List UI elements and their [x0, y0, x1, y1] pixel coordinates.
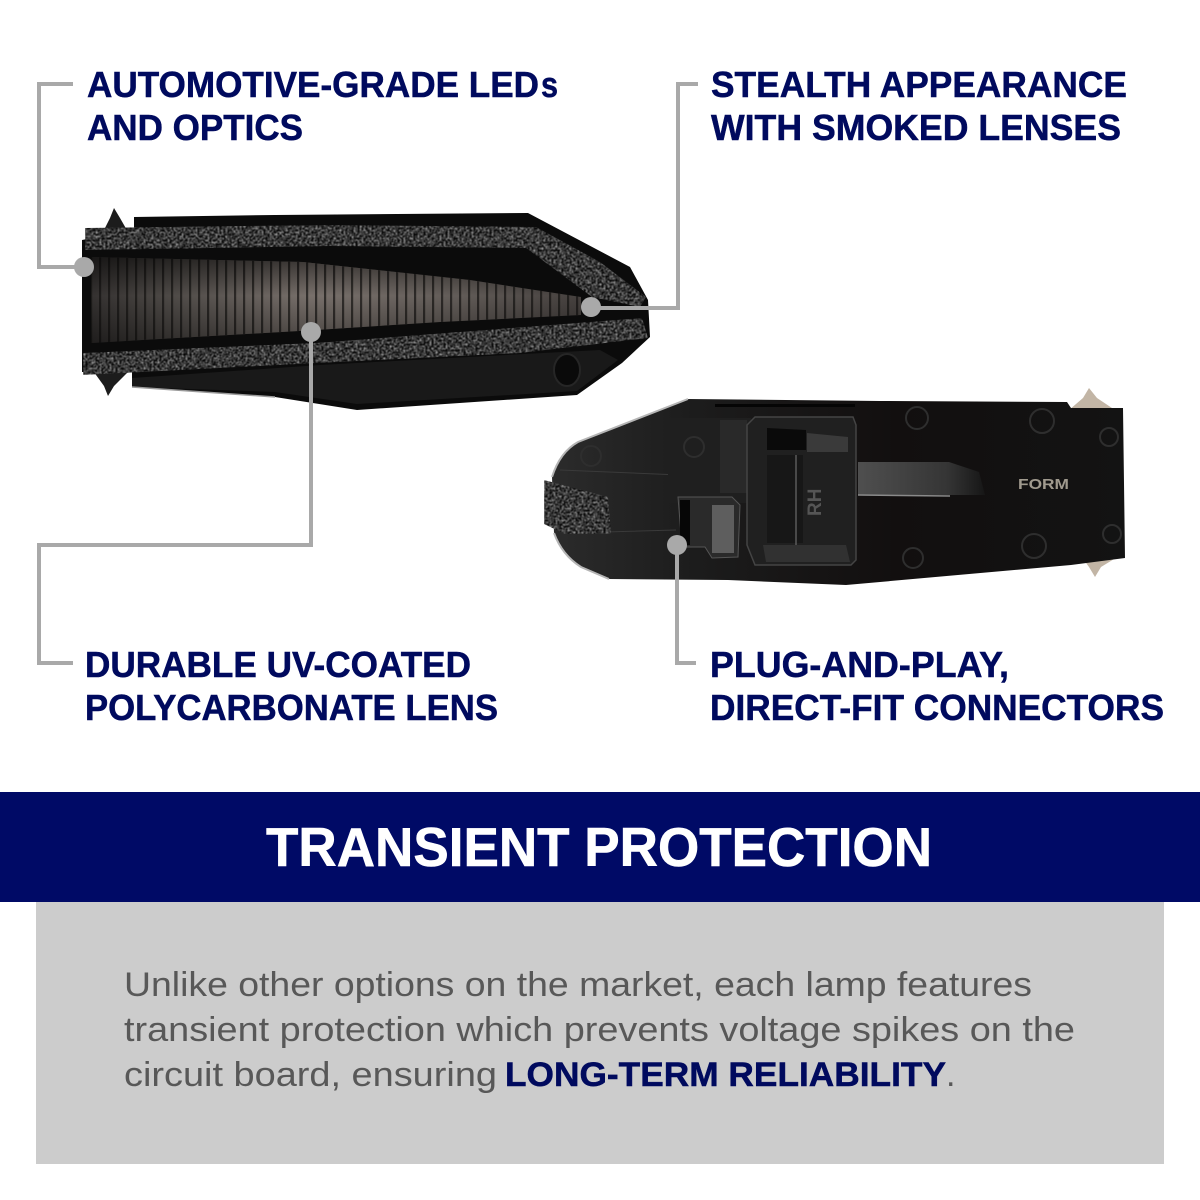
description text: Unlike other options on the market, each lamp features: [124, 966, 1032, 1004]
feature label: automotive-grade LEDs: AUTOMOTIVE-GRADE LED: [87, 64, 539, 105]
leader line: polycarbonate lens: [39, 322, 321, 663]
description text: circuit board, ensuring: [124, 1056, 497, 1094]
product photo: front of lamp with smoked lens: [82, 208, 650, 410]
foam gasket: lower strip: [83, 318, 648, 375]
panel: description: [36, 902, 1164, 1164]
feature label: polycarbonate lens: [85, 644, 498, 728]
feature label: polycarbonate lens: POLYCARBONATE LENS: [85, 687, 498, 728]
description text: [124, 966, 1075, 1094]
description text: .: [946, 1056, 955, 1094]
leader line: connectors: [667, 535, 696, 663]
feature label: automotive-grade LEDs: [87, 64, 558, 148]
connector housing: [747, 417, 856, 565]
feature label: automotive-grade LEDs: AND OPTICS: [87, 107, 303, 148]
banner heading: TRANSIENT PROTECTION: [266, 816, 932, 878]
feature label: connectors: DIRECT-FIT CONNECTORS: [710, 687, 1164, 728]
plug connector: [678, 497, 740, 558]
feature label: automotive-grade LEDs: s: [541, 64, 558, 105]
feature label: connectors: [710, 644, 1164, 728]
foam gasket: upper strip: [85, 225, 646, 307]
feature label: stealth appearance: STEALTH APPEARANCE: [711, 64, 1127, 105]
FORM logo: FORM: [1018, 476, 1069, 493]
moulded RH mark: RH: [805, 489, 826, 516]
feature label: stealth appearance: WITH SMOKED LENSES: [711, 107, 1121, 148]
feature label: stealth appearance: [711, 64, 1127, 148]
mounting circles: [581, 407, 1121, 568]
feature label: connectors: PLUG-AND-PLAY,: [710, 644, 1009, 685]
banner: transient protection: [0, 792, 1200, 902]
description text: LONG-TERM RELIABILITY: [505, 1056, 946, 1094]
leader line: LEDs and optics: [39, 84, 94, 277]
feature label: polycarbonate lens: DURABLE UV-COATED: [85, 644, 471, 685]
description text: transient protection which prevents voltage spikes on the: [124, 1011, 1075, 1049]
foam gasket stub: [544, 480, 611, 534]
smoked lens with ribbed optics: [91, 257, 581, 343]
leader line: stealth appearance: [581, 84, 698, 317]
product photo: back of lamp with connector: [544, 388, 1125, 585]
blade rib: [858, 462, 985, 496]
